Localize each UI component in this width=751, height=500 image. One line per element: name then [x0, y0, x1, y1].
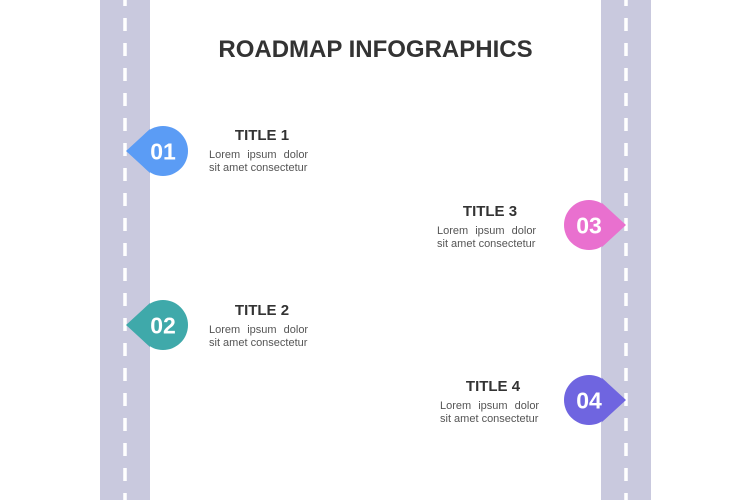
text block 1: TITLE 1	[235, 127, 289, 144]
marker 03	[564, 200, 626, 250]
marker 01	[126, 126, 188, 176]
text block 4: TITLE 4	[466, 378, 520, 395]
text block 2: Lorem ipsum dolor	[209, 324, 308, 336]
text block 1: Lorem ipsum dolor	[209, 149, 308, 161]
title: ROADMAP INFOGRAPHICS	[218, 36, 533, 63]
marker 04	[564, 375, 626, 425]
text block 1	[209, 127, 308, 174]
text block 2: TITLE 2	[235, 302, 289, 319]
text block 4: sit amet consectetur	[440, 413, 538, 425]
marker 02: 02	[150, 312, 176, 338]
text block 3: sit amet consectetur	[437, 238, 535, 250]
text block 1: sit amet consectetur	[209, 162, 307, 174]
text block 4: Lorem ipsum dolor	[440, 400, 539, 412]
text block 3: TITLE 3	[463, 203, 517, 220]
text block 3	[437, 203, 536, 250]
text block 4	[440, 378, 539, 425]
marker 04: 04	[576, 388, 602, 414]
text block 2	[209, 302, 308, 349]
text block 3: Lorem ipsum dolor	[437, 225, 536, 237]
road: left	[100, 0, 150, 500]
marker 02	[126, 300, 188, 350]
marker 01: 01	[150, 138, 176, 164]
marker 03: 03	[576, 212, 602, 238]
road: right	[601, 0, 651, 500]
text block 2: sit amet consectetur	[209, 337, 307, 349]
